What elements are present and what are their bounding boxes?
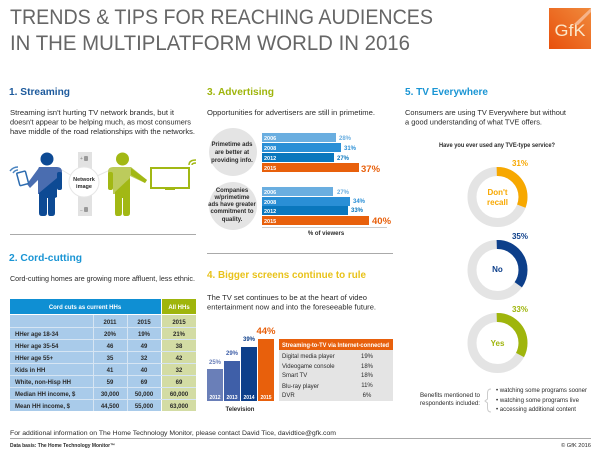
bar chart: companies: 2015 (264, 219, 276, 225)
logo: GfK (549, 8, 591, 49)
panel: 1. Streaming (9, 87, 196, 216)
bar chart: television: 29% (226, 351, 239, 357)
text block: benefits: Benefits mentioned to (420, 393, 481, 399)
bar chart: television: 2015 (260, 395, 272, 401)
bar chart: primetime ads: 2012 (264, 156, 276, 162)
panel: 2. Cord-cutting (9, 253, 196, 411)
bar chart: television: 2012 (209, 395, 221, 401)
table: cord-cutting demographics: 32 (141, 356, 148, 362)
text block: benefits: respondents included: (420, 401, 480, 407)
donut chart: no: 35% (512, 232, 528, 241)
table: cord-cutting demographics: 40 (141, 368, 148, 374)
donut chart: don't recall: 31% (512, 159, 528, 168)
table: cord-cutting demographics: 21% (173, 332, 186, 338)
table: streaming-to-TV devices: 11% (361, 383, 373, 389)
callout: companies quality: quality. (222, 217, 243, 223)
donut chart: don't recall: recall (487, 198, 508, 207)
bar chart: companies: 40% (372, 216, 392, 227)
icon: network image scale: Network (73, 177, 96, 183)
bar chart: television: 39% (243, 337, 256, 343)
text block: bigger screens intro (207, 295, 376, 312)
text block: bigger screens intro: The TV set continues to be at the heart of video (207, 295, 367, 302)
callout: companies quality: w/primetime (213, 195, 250, 201)
table: cord-cutting demographics: 55,000 (135, 404, 154, 410)
footer (10, 430, 591, 449)
logo: GfK: GfK (554, 21, 586, 40)
table: streaming-to-TV devices: Streaming-to-TV via Internet-connected (282, 343, 389, 349)
table: cord-cutting demographics: 19% (138, 332, 151, 338)
heading: Streaming: 1. Streaming (9, 87, 70, 98)
axis label: Television (226, 407, 255, 413)
text block: benefits: • accessing additional content (496, 407, 576, 413)
text block: benefits: • watching some programs sooner (496, 388, 587, 394)
callout: primetime ads better: Primetime ads (211, 142, 253, 148)
table: cord-cutting demographics: HHer age 18-34 (15, 332, 59, 338)
table: cord-cutting demographics: 20% (104, 332, 117, 338)
table: cord-cutting demographics: 38 (176, 344, 183, 350)
donut chart: don't recall (472, 159, 528, 222)
title (10, 6, 433, 55)
text block: TV Everywhere intro: Consumers are using TV Everywhere but without (405, 110, 566, 117)
table: cord-cutting demographics: 30,000 (101, 392, 120, 398)
icon: network image scale: + (80, 156, 83, 162)
icon: television (151, 160, 196, 190)
callout: companies quality: ads have greater (208, 202, 257, 208)
table: cord-cutting demographics: HHer age 55+ (15, 356, 54, 362)
callout: primetime ads better: are better at (215, 150, 249, 156)
icon: network image scale: − (80, 208, 83, 214)
table: cord-cutting demographics: 69 (141, 380, 148, 386)
table: cord-cutting demographics: 35 (107, 356, 114, 362)
text block: benefits: • watching some programs live (496, 398, 580, 404)
text block: streaming intro: Streaming isn't hurting TV network brands, but it (10, 110, 174, 117)
donut chart: no (472, 232, 528, 296)
bar chart: television: 2013 (226, 395, 238, 401)
divider (10, 234, 196, 235)
heading: Advertising: 3. Advertising (207, 87, 274, 98)
survey question: Have you ever used any TVE-type service? (439, 143, 555, 149)
bar chart: primetime ads: 31% (344, 146, 357, 152)
table: streaming-to-TV devices (279, 339, 393, 401)
donut chart: don't recall: Don't (487, 188, 508, 197)
table: cord-cutting demographics: 42 (176, 356, 183, 362)
divider (207, 253, 393, 254)
panel: 4. Bigger screens (207, 270, 393, 413)
bar chart: television (207, 326, 276, 413)
table: cord-cutting demographics: 2011 (103, 320, 117, 326)
table: streaming-to-TV devices: 6% (363, 393, 372, 399)
table: cord-cutting demographics: 49 (141, 344, 148, 350)
table: streaming-to-TV devices: Smart TV (282, 373, 307, 379)
donut chart: yes: Yes (491, 339, 505, 348)
table: streaming-to-TV devices: DVR (282, 393, 295, 399)
table: cord-cutting demographics: 44,500 (101, 404, 120, 410)
callout: primetime ads better (209, 128, 257, 176)
table: streaming-to-TV devices: 18% (361, 364, 374, 370)
bar chart: primetime ads (262, 133, 381, 175)
bar chart: companies (262, 187, 392, 237)
table: cord-cutting demographics: 60,000 (170, 392, 189, 398)
callout: companies quality: commitment to (210, 209, 254, 215)
table: cord-cutting demographics: All HHs (168, 305, 190, 311)
table: cord-cutting demographics: Median HH income, $ (15, 392, 76, 398)
panel: 5. TV Everywhere (405, 87, 587, 413)
bar chart: television: 2014 (243, 395, 255, 401)
title: TRENDS & TIPS FOR REACHING AUDIENCES (10, 6, 433, 29)
donut chart: no: No (492, 265, 503, 274)
text block: TV Everywhere intro: a good understanding of what TVE offers. (405, 120, 542, 126)
bar chart: companies: 33% (351, 208, 364, 214)
donut chart: yes: 33% (512, 305, 528, 314)
icon: network image scale (62, 152, 110, 216)
heading: Cord-cutting: 2. Cord-cutting (9, 253, 82, 264)
bar chart: primetime ads: 2015 (264, 166, 276, 172)
bar chart: companies: 2008 (264, 200, 276, 206)
table: cord-cutting demographics: 2015 (172, 320, 186, 326)
table: streaming-to-TV devices: 19% (361, 354, 374, 360)
bar chart: television: 25% (209, 360, 222, 366)
table: streaming-to-TV devices: Videogame console (282, 364, 335, 370)
table: cord-cutting demographics: White, non-Hisp HH (15, 380, 71, 386)
table: cord-cutting demographics: 46 (107, 344, 114, 350)
text block: streaming intro: doesn't appear to be helping much, as most consumers (10, 120, 192, 126)
text block: TV Everywhere intro (405, 110, 566, 126)
title: IN THE MULTIPLATFORM WORLD IN 2016 (10, 32, 410, 55)
footer: For additional information on The Home Technology Monitor, please contact David Tice, davidtice@gfk.com (10, 430, 336, 437)
bar chart: primetime ads: 28% (339, 136, 352, 142)
icon: person with tablet (10, 152, 62, 216)
callout: companies quality (208, 182, 257, 230)
bar chart: primetime ads: 37% (361, 164, 381, 175)
table: cord-cutting demographics: 63,000 (170, 404, 189, 410)
table: streaming-to-TV devices: 18% (361, 373, 374, 379)
bar chart: primetime ads: 2006 (264, 136, 276, 142)
table: cord-cutting demographics: Mean HH income, $ (15, 404, 71, 410)
table: cord-cutting demographics (10, 299, 196, 411)
icon: person with TV (108, 152, 147, 216)
bar chart: companies: 2012 (264, 209, 276, 215)
table: streaming-to-TV devices: Blu-ray player (282, 384, 319, 390)
table: cord-cutting demographics: 50,000 (135, 392, 154, 398)
callout: primetime ads better: providing info. (211, 158, 253, 164)
donut chart: yes (472, 305, 528, 368)
text block: streaming intro (10, 110, 195, 136)
table: cord-cutting demographics: 41 (107, 368, 114, 374)
bar chart: companies: 34% (353, 199, 366, 205)
footer: Data basis: The Home Technology Monitor™ (10, 443, 115, 449)
bar chart: primetime ads: 2008 (264, 146, 276, 152)
table: cord-cutting demographics: Kids in HH (15, 368, 45, 374)
table: cord-cutting demographics: 59 (107, 380, 114, 386)
text block: bigger screens intro: entertainment now and into the foreseeable future. (207, 304, 376, 312)
text block: advertising intro: Opportunities for advertisers are still in primetime. (207, 110, 375, 117)
footer: © GfK 2016 (561, 442, 591, 449)
table: cord-cutting demographics: 69 (176, 380, 183, 386)
heading: TV Everywhere: 5. TV Everywhere (405, 87, 488, 98)
bar chart: television: 44% (256, 326, 276, 337)
table: cord-cutting demographics: 32 (176, 368, 183, 374)
heading: Bigger screens: 4. Bigger screens continue to rule (207, 270, 366, 281)
panel: 3. Advertising (207, 87, 392, 237)
text block: streaming intro: have middle of the road relationships with the networks. (10, 129, 195, 136)
callout: companies quality: Companies (216, 188, 249, 194)
text block: benefits (420, 388, 587, 413)
bar chart: companies: 27% (337, 190, 350, 196)
table: cord-cutting demographics: Cord cuts as current HHs (49, 305, 122, 311)
axis label: % of viewers (308, 231, 345, 237)
table: cord-cutting demographics: HHer age 35-54 (15, 344, 59, 350)
icon: network image scale: image (76, 184, 92, 190)
text block: cord-cutting intro: Cord-cutting homes are growing more affluent, less ethnic. (10, 276, 195, 283)
table: cord-cutting demographics: 2015 (137, 320, 151, 326)
bar chart: primetime ads: 27% (337, 156, 350, 162)
table: streaming-to-TV devices: Digital media player (282, 354, 335, 360)
bar chart: companies: 2006 (264, 190, 276, 196)
